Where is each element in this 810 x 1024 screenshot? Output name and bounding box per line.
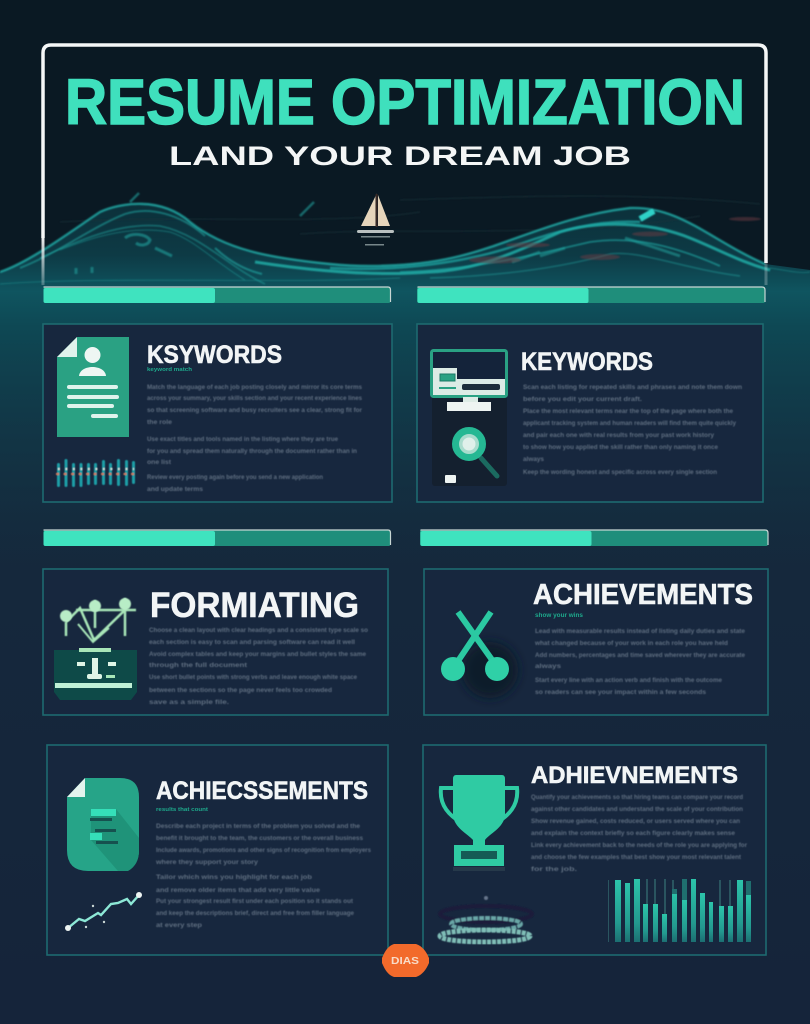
body text: across your summary, your skills section and your recent experience lines [147,395,362,402]
body text [523,384,742,476]
heading: KSYWORDS: KSYWORDS [147,341,282,369]
body text: Use exact titles and tools named in the listing where they are true [147,436,338,443]
body text: Tailor which wins you highlight for each job [156,874,312,881]
icon: audio waveform [56,459,136,487]
body text: Place the most relevant terms near the top of the page where both the [523,408,733,415]
body text [155,823,371,929]
body text: Avoid complex tables and keep your margins and bullet styles the same [149,651,366,658]
body text: Use short bullet points with strong verbs and leave enough white space [149,674,357,681]
body text [534,628,745,696]
body text: for the job. [531,866,577,873]
body text: Keep the wording honest and specific across every single section [523,469,717,476]
accent line: keyword match [147,367,192,373]
panel: keywords search [417,324,763,502]
body text: and pair each one with real results from your past work history [523,432,714,439]
body text: Describe each project in terms of the problem you solved and the [156,823,360,830]
body text: where they support your story [155,859,258,866]
icon: molecule and layout box [54,598,137,700]
progress bar: middle right [420,530,768,546]
badge: DIAS [391,956,419,967]
icon: trend line [65,892,142,931]
title: RESUME OPTIMIZATION [65,66,745,138]
body text: and keep the descriptions brief, direct and free from filler language [156,910,354,917]
accent line: results that count [156,807,208,813]
body text: so that screening software and busy recruiters see a clear, strong fit for [147,407,362,414]
heading: ACHIECSSEMENTS: ACHIECSSEMENTS [156,777,368,805]
icon: rounded document [67,778,139,871]
icon: scissors [441,612,518,698]
icon: trophy [441,775,517,871]
body text: Add numbers, percentages and time saved wherever they are accurate [535,652,745,659]
body text: and remove older items that add very little value [156,887,320,894]
body text [149,627,368,706]
body text: Link every achievement back to the needs of the role you are applying for [531,842,747,849]
body text: against other candidates and understand the scale of your contribution [531,806,743,813]
heading: ACHIEVEMENTS: ACHIEVEMENTS [533,579,753,611]
progress bar: top left [44,286,390,303]
panel: keywords resume [43,324,392,502]
body text: Scan each listing for repeated skills and phrases and note them down [523,384,742,391]
body text: Show revenue gained, costs reduced, or users served where you can [531,818,740,825]
body text: and update terms [147,486,203,493]
panel: achievements document [47,745,388,955]
body text: Quantify your achievements so that hiring teams can compare your record [531,794,743,801]
body text: each section is easy to scan and parsing software can read it well [149,639,355,646]
body text: Include awards, promotions and other signs of recognition from employers [156,847,371,854]
badge [382,944,429,977]
progress bar: top right [417,286,765,303]
body text: applicant tracking system and human readers will find them quite quickly [523,420,736,427]
subtitle: LAND YOUR DREAM JOB [169,141,631,171]
panel: achievements trophy [423,745,766,955]
progress bar: middle left [44,530,390,546]
body text: Lead with measurable results instead of listing daily duties and state [535,628,745,635]
body text: Review every posting again before you send a new application [147,474,323,481]
body text: Start every line with an action verb and finish with the outcome [535,677,722,684]
body text: through the full document [149,662,248,669]
body text: before you edit your current draft. [523,396,642,403]
accent line: show your wins [535,613,584,619]
body text: save as a simple file. [149,699,229,706]
body text: the role [147,419,172,426]
header: wave illustration [0,193,810,292]
body text: so readers can see your impact within a few seconds [535,689,706,696]
icon: stacked rings [440,896,532,942]
body text: what changed because of your work in each role you have held [534,640,728,647]
body text [531,794,747,873]
heading: FORMIATING: FORMIATING [150,586,359,625]
heading: ADHIEVNEMENTS: ADHIEVNEMENTS [531,762,738,789]
body text: and explain the context briefly so each figure clearly makes sense [531,830,735,837]
body text: to show how you applied the skill rather than only naming it once [523,444,718,451]
body text: always [523,456,544,463]
icon: sailboat [357,193,394,246]
body text: for you and spread them naturally through the document rather than in [147,448,357,455]
body text: benefit it brought to the team, the customers or the overall business [156,835,363,842]
body text: always [535,663,561,670]
panel: achievements scissors [424,569,768,715]
body text: at every step [156,922,202,929]
body text: Put your strongest result first under each position so it stands out [156,898,354,905]
icon: monitor and magnifier [432,350,507,486]
body text: and choose the few examples that best show your most relevant talent [531,854,742,861]
chart: bar chart [608,879,751,942]
icon: resume document [57,337,129,437]
body text [147,384,362,493]
body text: between the sections so the page never feels too crowded [149,687,332,694]
body text: Match the language of each job posting closely and mirror its core terms [147,384,362,391]
body text: Choose a clean layout with clear headings and a consistent type scale so [149,627,368,634]
header frame [43,45,766,285]
body text: one list [147,459,172,466]
heading: KEYWORDS: KEYWORDS [521,348,653,376]
panel: formatting [43,569,388,715]
